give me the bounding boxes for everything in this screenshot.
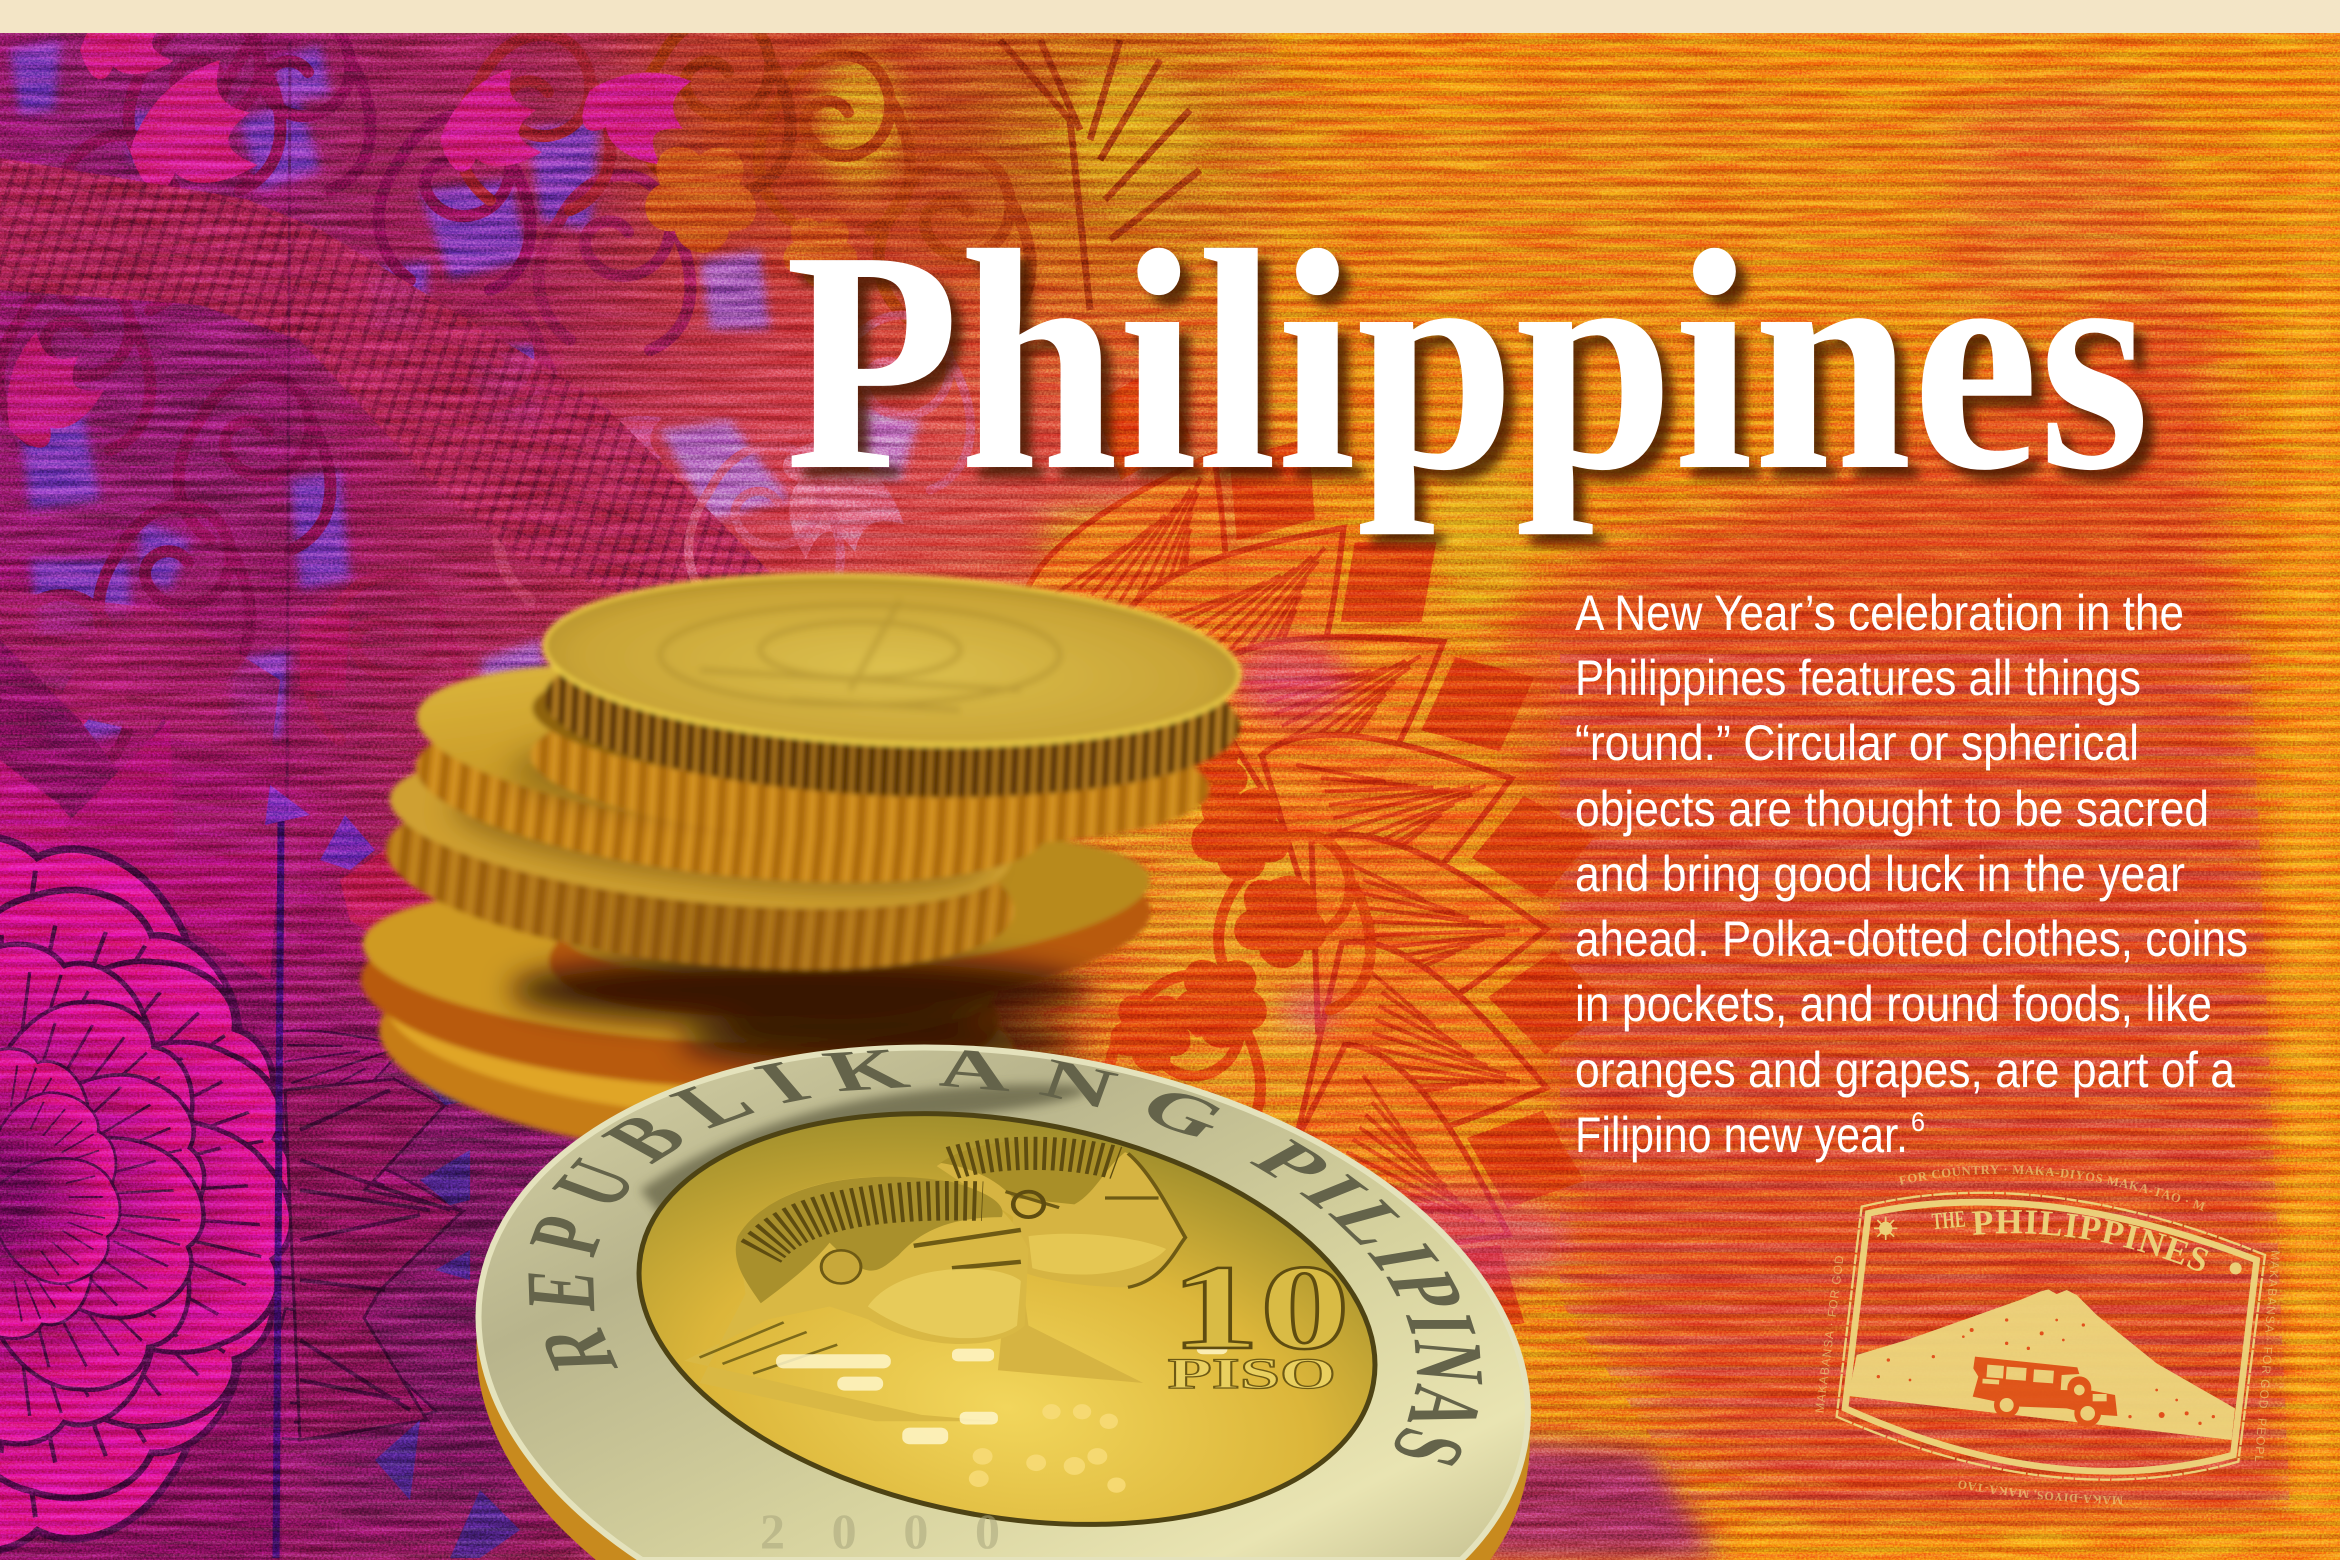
gold centre xyxy=(606,1059,1408,1560)
scroll strokes xyxy=(0,15,1030,770)
stamp heading: PHILIPPINES xyxy=(1972,1210,2208,1271)
body text: and bring good luck in the year xyxy=(1575,846,2185,902)
stamp frame xyxy=(1837,1193,2265,1480)
pink streaks xyxy=(1560,640,2290,1510)
diagonal band hatching xyxy=(0,158,790,620)
coin 6 xyxy=(355,868,1005,1107)
body text: 6 xyxy=(1911,1107,1925,1137)
yellow highlights xyxy=(820,50,1530,610)
petals xyxy=(1015,406,1569,1325)
highlights xyxy=(776,1342,1227,1444)
petal ring middle xyxy=(0,921,227,1467)
vine blossoms xyxy=(1110,738,1327,1072)
date at rim: 2000 xyxy=(760,1503,1000,1559)
illustration: lotus rosette behind coins xyxy=(253,345,1617,1474)
stamp: The Philippines jeepney xyxy=(1785,1149,2283,1508)
body text: “round.” Circular or spherical xyxy=(1575,715,2139,771)
stamp outer legend right: MAKABANSA · FOR GOD, PEOPLE xyxy=(1998,1206,2280,1462)
panel: banknote ornament, scrolls xyxy=(0,0,1200,1010)
vertical note rule xyxy=(287,40,290,800)
illustration: ten piso coin xyxy=(476,966,1548,1560)
dark band xyxy=(640,1084,1087,1225)
illustration: coin stack xyxy=(355,561,1243,1183)
stamp speckles xyxy=(1877,1318,2215,1425)
mint dots xyxy=(969,1404,1126,1493)
star leaves xyxy=(265,785,520,1558)
body text: Filipino new year. xyxy=(1575,1107,1908,1163)
coin 1 top xyxy=(541,561,1243,811)
red-orange vine xyxy=(1109,835,1370,1150)
stamp jeepney xyxy=(1973,1357,2117,1427)
portrait right xyxy=(937,1139,1185,1383)
coin 7 xyxy=(371,918,1029,1183)
body text: in pockets, and round foods, like xyxy=(1575,976,2212,1032)
body text: objects are thought to be sacred xyxy=(1575,781,2209,837)
mauve patches xyxy=(10,40,920,770)
petal ring inner xyxy=(0,1034,134,1355)
title: Philippines xyxy=(785,186,2150,536)
illustration: magenta flower xyxy=(0,640,520,1560)
portrait left xyxy=(684,1177,1028,1421)
fern fans xyxy=(1000,40,1200,310)
coin edge xyxy=(476,1073,1530,1560)
coin 5 xyxy=(543,813,1157,1038)
portraits xyxy=(684,1139,1350,1493)
denomination: 10 xyxy=(1170,1240,1350,1374)
lower rosette leaves, purple xyxy=(253,995,460,1474)
body text: ahead. Polka-dotted clothes, coins xyxy=(1575,911,2248,967)
body text: oranges and grapes, are part of a xyxy=(1575,1042,2235,1098)
pink foliage xyxy=(0,0,904,1010)
body text: Philippines features all things xyxy=(1575,650,2141,706)
stamp mountain xyxy=(1848,1289,2235,1440)
piso label: PISO xyxy=(1168,1350,1336,1398)
body text xyxy=(1575,585,2248,1163)
petal ring outer xyxy=(0,819,315,1560)
band lower second xyxy=(0,590,280,760)
pink wash over rosette xyxy=(1230,640,1570,1290)
body text: A New Year’s celebration in the xyxy=(1575,585,2184,641)
top paper strip xyxy=(0,0,2340,33)
coin 1 relief xyxy=(660,600,1060,710)
coin 4 xyxy=(377,726,1023,997)
stamp heading small: THE xyxy=(1931,1207,1966,1235)
vertical rule xyxy=(276,820,281,1558)
coin 2 xyxy=(527,641,1213,862)
stamp outer legend left: MAKABANSA · FOR GOD xyxy=(1815,1256,1843,1412)
red tips xyxy=(1072,345,1617,1367)
coin deep shadow xyxy=(510,956,1090,1066)
stamp stars xyxy=(1874,1217,2242,1274)
jeepney windows xyxy=(1982,1365,2107,1421)
stamp outer legend bottom: MAKA-DIYOS, MAKA-TAO xyxy=(1958,1480,2123,1504)
ring legend: REPUBLIKANG PILIPINAS xyxy=(528,1050,1482,1466)
stamp outer legend top: FOR COUNTRY · MAKA-DIYOS MAKA-TAO · MAKA xyxy=(1872,1165,2206,1236)
diagonal band xyxy=(0,158,790,620)
orange flower rosettes top xyxy=(645,147,857,288)
outer silver ring xyxy=(479,1047,1528,1560)
pink scroll highlights xyxy=(689,315,970,620)
red-orange brushed field xyxy=(1500,260,2290,1525)
coin 3 xyxy=(408,638,1056,909)
